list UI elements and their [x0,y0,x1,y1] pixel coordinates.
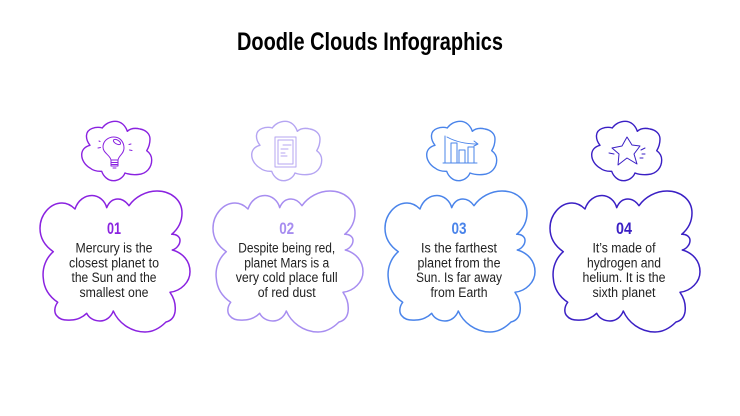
small cloud 4 [592,121,662,181]
icon: bar chart [443,136,478,163]
panel: 04 Saturn [550,121,700,332]
panel: 02 Mars [213,121,363,332]
text: Mercury [69,241,159,300]
big cloud 3 [385,191,535,332]
icon: light bulb [98,137,132,168]
panel: 03 Neptune [385,121,535,332]
text: Mercury: closest planet to [69,255,159,270]
big cloud 2 [213,191,363,332]
text: Mars: planet Mars is a [244,255,330,270]
text: Neptune: from Earth [430,285,488,300]
text: Mars [236,241,338,300]
big cloud 4 [550,191,700,332]
text: Mars: of red dust [258,285,316,300]
text: Mercury: smallest one [80,285,148,300]
text: Saturn [582,241,666,300]
text: Saturn: helium. It is the [582,270,666,285]
big cloud 1 [40,191,190,332]
text: Mercury: Mercury is the [76,241,152,256]
title: Doodle Clouds Infographics [237,28,503,56]
text: Neptune: Sun. Is far away [416,270,502,285]
number 02: 02 [279,219,294,238]
text: Saturn: It’s made of [592,241,656,256]
text: Neptune: planet from the [418,255,500,270]
small cloud 1 [82,121,152,181]
small cloud 2 [252,121,322,181]
number 03: 03 [452,219,466,238]
text: Mercury: the Sun and the [72,270,156,285]
small cloud 3 [427,121,497,181]
text: Saturn: sixth planet [592,285,656,300]
text: Mars: Despite being red, [238,241,335,256]
number 04: 04 [616,219,632,238]
panel: 01 Mercury [40,121,190,332]
icon: star [609,137,645,165]
text: Neptune [416,241,502,300]
text: Neptune: Is the farthest [421,241,497,256]
number 01: 01 [107,219,121,238]
text: Saturn: hydrogen and [587,255,661,270]
text: Mars: very cold place full [236,270,338,285]
icon: document [275,137,296,167]
